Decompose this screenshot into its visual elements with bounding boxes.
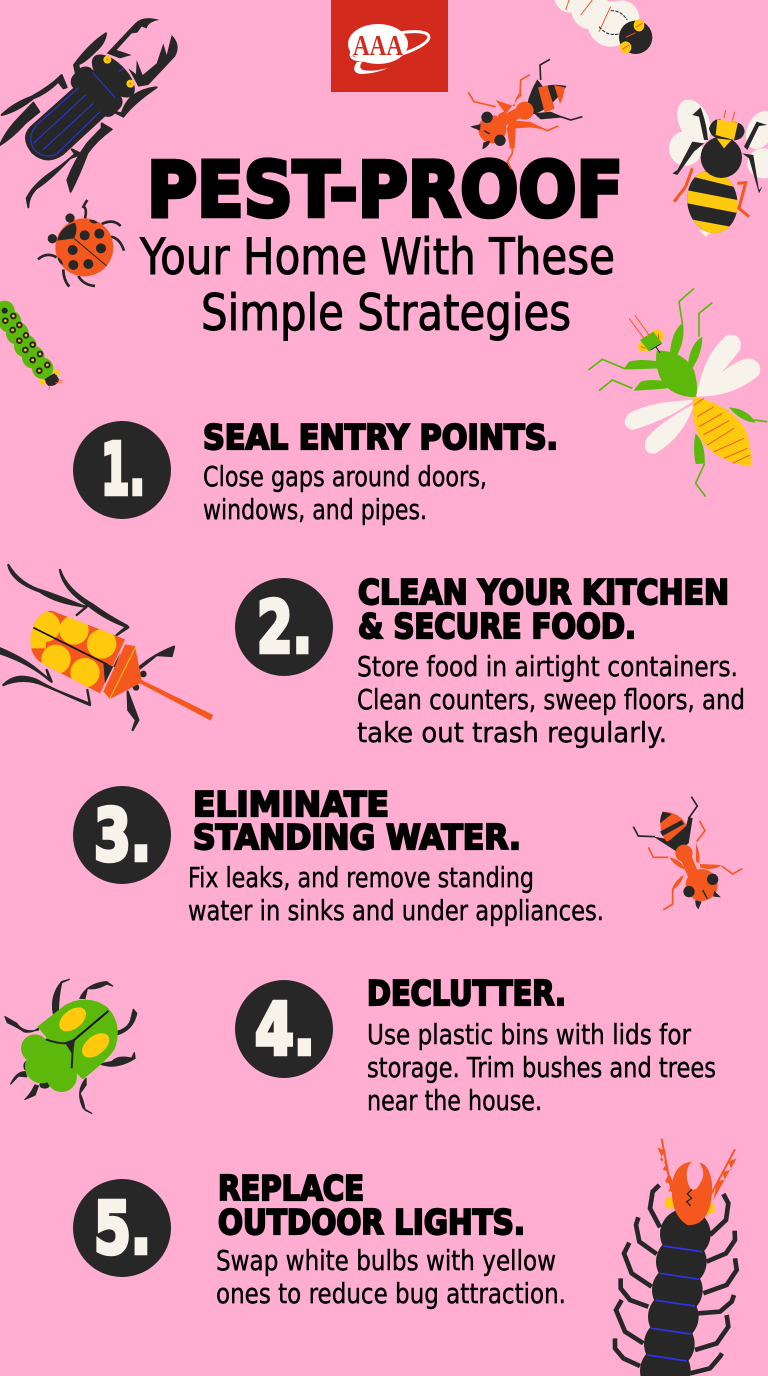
step 1: windows, and pipes. bbox=[203, 494, 427, 526]
icon: orange ant right bbox=[633, 797, 742, 910]
step 3: Fix leaks, and remove standing bbox=[188, 862, 534, 894]
icon: orange and yellow beetle with snout bbox=[0, 565, 213, 730]
step 4: 4. bbox=[255, 988, 315, 1071]
icon: ladybug bbox=[38, 200, 124, 287]
icon: praying mantis bbox=[588, 288, 767, 497]
step 2: CLEAN YOUR KITCHEN bbox=[358, 573, 729, 613]
step 3: water in sinks and under appliances. bbox=[188, 895, 604, 927]
step 5: REPLACE bbox=[218, 1169, 364, 1209]
step 4: DECLUTTER. bbox=[367, 974, 566, 1014]
step 2 bbox=[235, 573, 745, 749]
step 1 bbox=[73, 418, 558, 526]
title: Simple Strategies bbox=[201, 284, 571, 342]
icon: centipede bbox=[615, 1139, 737, 1376]
icon: bee bbox=[669, 94, 768, 237]
step 5: 5. bbox=[94, 1187, 151, 1270]
step 5 bbox=[73, 1169, 566, 1310]
step 1: 1. bbox=[101, 428, 145, 511]
step 5: Swap white bulbs with yellow bbox=[216, 1245, 556, 1277]
icon: orange ant bbox=[468, 59, 582, 169]
AAA logo bbox=[331, 0, 448, 92]
step 2: take out trash regularly. bbox=[357, 717, 667, 749]
step 4 bbox=[235, 974, 716, 1117]
step 2: & SECURE FOOD. bbox=[358, 607, 636, 647]
step 3: ELIMINATE bbox=[193, 785, 389, 825]
AAA logo: AAA bbox=[353, 31, 404, 62]
icon: stag beetle bbox=[0, 18, 178, 207]
icon: cream grub bbox=[554, 0, 652, 54]
title: Your Home With These bbox=[139, 228, 615, 286]
step 1: Close gaps around doors, bbox=[203, 461, 487, 493]
step 3: 3. bbox=[94, 794, 151, 877]
step 2: 2. bbox=[257, 586, 312, 669]
step 5: ones to reduce bug attraction. bbox=[216, 1278, 566, 1310]
icon: green beetle bbox=[5, 979, 137, 1113]
step 3 bbox=[73, 785, 604, 927]
step 3: STANDING WATER. bbox=[193, 818, 521, 858]
title bbox=[139, 145, 623, 342]
step 4: near the house. bbox=[367, 1085, 542, 1117]
step 5: OUTDOOR LIGHTS. bbox=[218, 1203, 525, 1243]
step 1: SEAL ENTRY POINTS. bbox=[203, 418, 558, 458]
title: PEST-PROOF bbox=[147, 145, 623, 234]
icon: green caterpillar bbox=[0, 301, 63, 390]
step 4: Use plastic bins with lids for bbox=[367, 1019, 692, 1051]
